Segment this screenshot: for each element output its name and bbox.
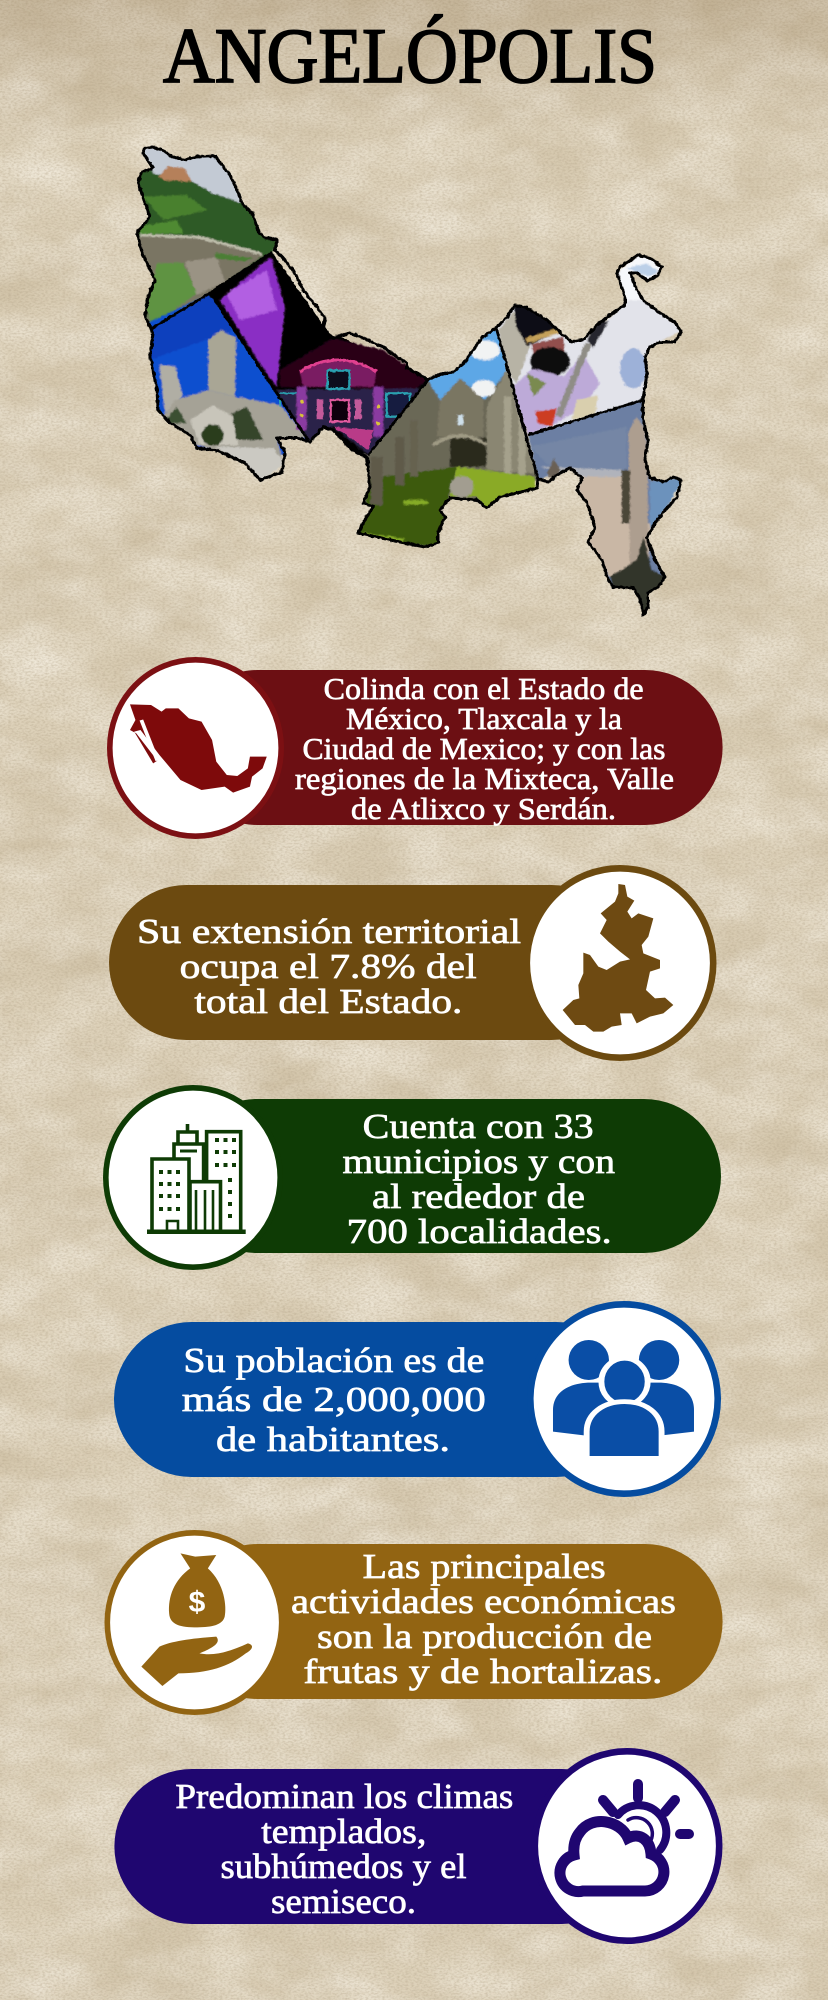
map outline	[137, 147, 681, 615]
photo dividers	[151, 252, 643, 479]
pill: economy background	[180, 1544, 723, 1699]
text: municipalities: 700 localidades.	[347, 1212, 612, 1251]
text: municipalities: Cuenta con 33	[363, 1107, 594, 1146]
text: population: de habitantes.	[216, 1420, 450, 1459]
text: economy: Las principales	[363, 1547, 606, 1586]
text: borders	[295, 671, 674, 826]
circle: people icon badge	[530, 1304, 718, 1494]
title: ANGELÓPOLIS	[163, 12, 657, 99]
circle: weather icon badge	[535, 1751, 719, 1941]
text: municipalities: al rededor de	[372, 1177, 585, 1216]
photo collage map of Angelópolis	[133, 143, 683, 618]
text: population: Su población es de	[183, 1341, 484, 1380]
icon: map of Mexico	[130, 704, 267, 793]
text: borders: Colinda con el Estado de	[324, 671, 644, 706]
text: borders: regiones de la Mixteca, Valle	[295, 761, 674, 796]
photo: blue sky with tower	[149, 292, 306, 478]
text: municipalities: municipios y con	[342, 1142, 615, 1181]
icon: sun and cloud	[560, 1784, 689, 1892]
photo group: left half of collage	[133, 143, 432, 490]
panel: climate	[114, 1751, 719, 1941]
photo: hill with church	[138, 148, 276, 323]
text: population: más de 2,000,000	[182, 1380, 486, 1419]
text: economy	[291, 1547, 676, 1691]
icon: hand holding money bag	[141, 1553, 252, 1686]
panel: municipalities	[106, 1088, 721, 1267]
text: economy: actividades económicas	[291, 1582, 676, 1621]
photo: church tower and sky	[528, 400, 683, 618]
text: municipalities	[342, 1107, 615, 1251]
panel: borders	[110, 660, 723, 836]
text: borders: de Atlixco y Serdán.	[351, 791, 616, 826]
text: territory	[137, 912, 521, 1021]
pill: climate background	[114, 1769, 639, 1924]
text: climate: templados,	[261, 1812, 426, 1851]
photo: illuminated facade	[210, 252, 432, 455]
icon: group of people	[553, 1340, 694, 1458]
text: climate: subhúmedos y el	[220, 1847, 467, 1886]
text: climate	[175, 1777, 513, 1921]
icon: hand holding money bag: $	[189, 1586, 206, 1619]
text: territory: ocupa el 7.8% del	[180, 947, 477, 986]
panel: economy	[107, 1533, 723, 1712]
circle: buildings icon badge	[106, 1088, 280, 1267]
pill: territory background	[109, 885, 629, 1040]
icon: city buildings	[147, 1124, 246, 1232]
pill: municipalities background	[180, 1099, 721, 1253]
photo: dancer in costume	[496, 253, 683, 435]
panel: territory	[109, 868, 713, 1058]
text: territory: total del Estado.	[194, 982, 462, 1021]
circle: money icon badge	[107, 1533, 282, 1712]
circle: Mexico icon badge	[110, 660, 281, 836]
text: borders: Ciudad de Mexico; y con las	[302, 731, 666, 766]
panel: population	[114, 1304, 718, 1494]
pill: borders background	[180, 670, 723, 825]
text: climate: semiseco.	[271, 1882, 416, 1921]
text: economy: son la producción de	[317, 1617, 652, 1656]
circle: Puebla icon badge	[527, 868, 713, 1058]
text: population	[182, 1341, 486, 1459]
icon: map of Puebla	[563, 884, 673, 1032]
text: economy: frutas y de hortalizas.	[303, 1652, 662, 1691]
text: climate: Predominan los climas	[175, 1777, 513, 1816]
text: territory: Su extensión territorial	[137, 912, 521, 951]
pill: population background	[114, 1322, 634, 1477]
photo group: right half of collage	[353, 253, 683, 618]
text: borders: México, Tlaxcala y la	[346, 701, 622, 736]
photo: ruined convent	[353, 327, 538, 550]
